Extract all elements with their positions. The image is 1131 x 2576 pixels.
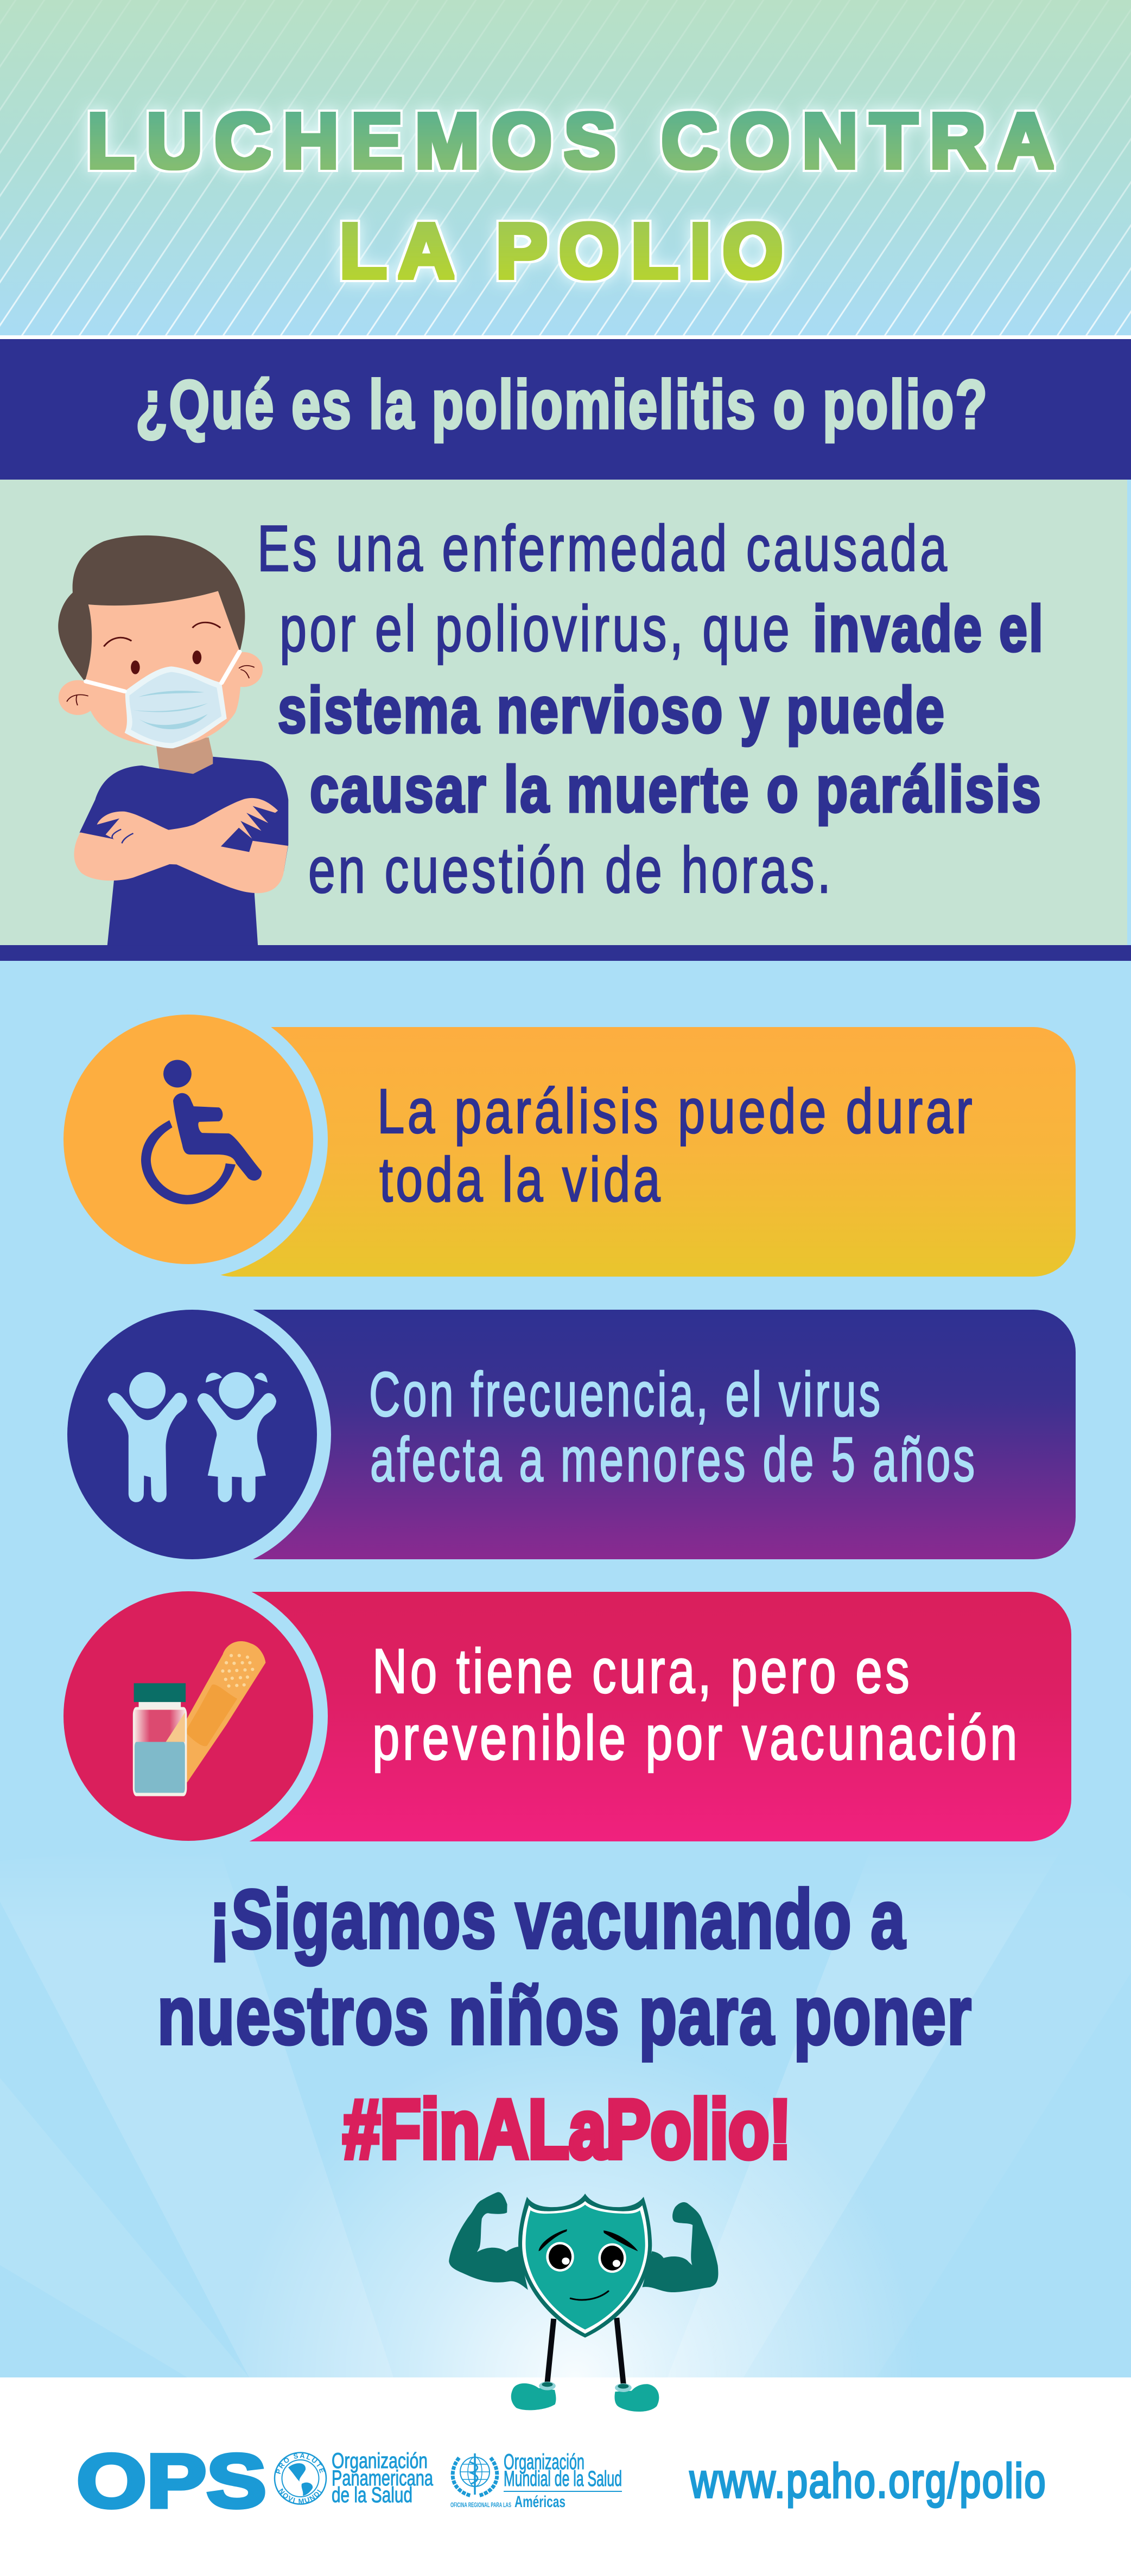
logo: PAHO seal: PRO SALUTE (276, 2453, 325, 2474)
logo text: PAHO: Panamericana (332, 2466, 434, 2490)
header panel with title (0, 0, 1131, 339)
logo: OPS: OPS (77, 2438, 266, 2523)
logo text: PAHO: Organización (332, 2449, 428, 2473)
icon: boy and girl (107, 1372, 276, 1502)
footer panel (77, 2356, 1047, 2523)
card: paralysis (49, 1000, 1076, 1279)
logo text: WHO: OFICINA REGIONAL PARA LAS (450, 2501, 511, 2509)
panel: definition (0, 480, 1131, 961)
question band (0, 339, 1131, 480)
card text: No tiene cura, pero es (372, 1636, 912, 1706)
definition text: por el poliovirus, que (279, 592, 792, 665)
logo: PAHO seal (274, 2452, 327, 2505)
definition text: en cuestión de horas. (308, 834, 834, 907)
background: light blue with rays (0, 961, 1131, 2377)
card text (372, 1636, 1020, 1773)
definition text: sistema nervioso y puede (278, 674, 946, 747)
mascot: shield with muscles (449, 2192, 718, 2412)
icon: vaccine vial and bandage (133, 1641, 265, 1796)
definition text (257, 512, 1045, 907)
title (87, 97, 1054, 295)
illustration: boy with mask and crossed arms (58, 535, 288, 946)
website url: www.paho.org/polio (689, 2453, 1047, 2508)
card: children (53, 1296, 1076, 1573)
card text: La parálisis puede durar (377, 1076, 975, 1146)
logo text: PAHO: de la Salud (332, 2483, 412, 2507)
call to action: ¡Sigamos vacunando a (209, 1873, 906, 1966)
logo text: PAHO (332, 2449, 434, 2507)
logo text: WHO: Organización (504, 2450, 584, 2474)
card text: Con frecuencia, el virus (369, 1359, 883, 1430)
icon: wheelchair (141, 1060, 262, 1204)
logo: WHO emblem (453, 2453, 497, 2496)
logo text: WHO (450, 2450, 622, 2511)
card text (377, 1076, 975, 1215)
card text: toda la vida (379, 1144, 663, 1215)
call to action (157, 1873, 973, 2176)
logo: PAHO seal: NOVI MUNDI (279, 2488, 321, 2503)
logo text: WHO: Mundial de la Salud (504, 2467, 622, 2491)
card: vaccination (49, 1577, 1071, 1856)
definition text: invade el (813, 592, 1045, 665)
title: LUCHEMOS CONTRA (87, 97, 1054, 184)
title: LA POLIO (339, 207, 783, 295)
logo text: WHO: Américas (514, 2493, 566, 2511)
hashtag: #FinALaPolio! (343, 2083, 791, 2176)
card text (369, 1359, 977, 1495)
